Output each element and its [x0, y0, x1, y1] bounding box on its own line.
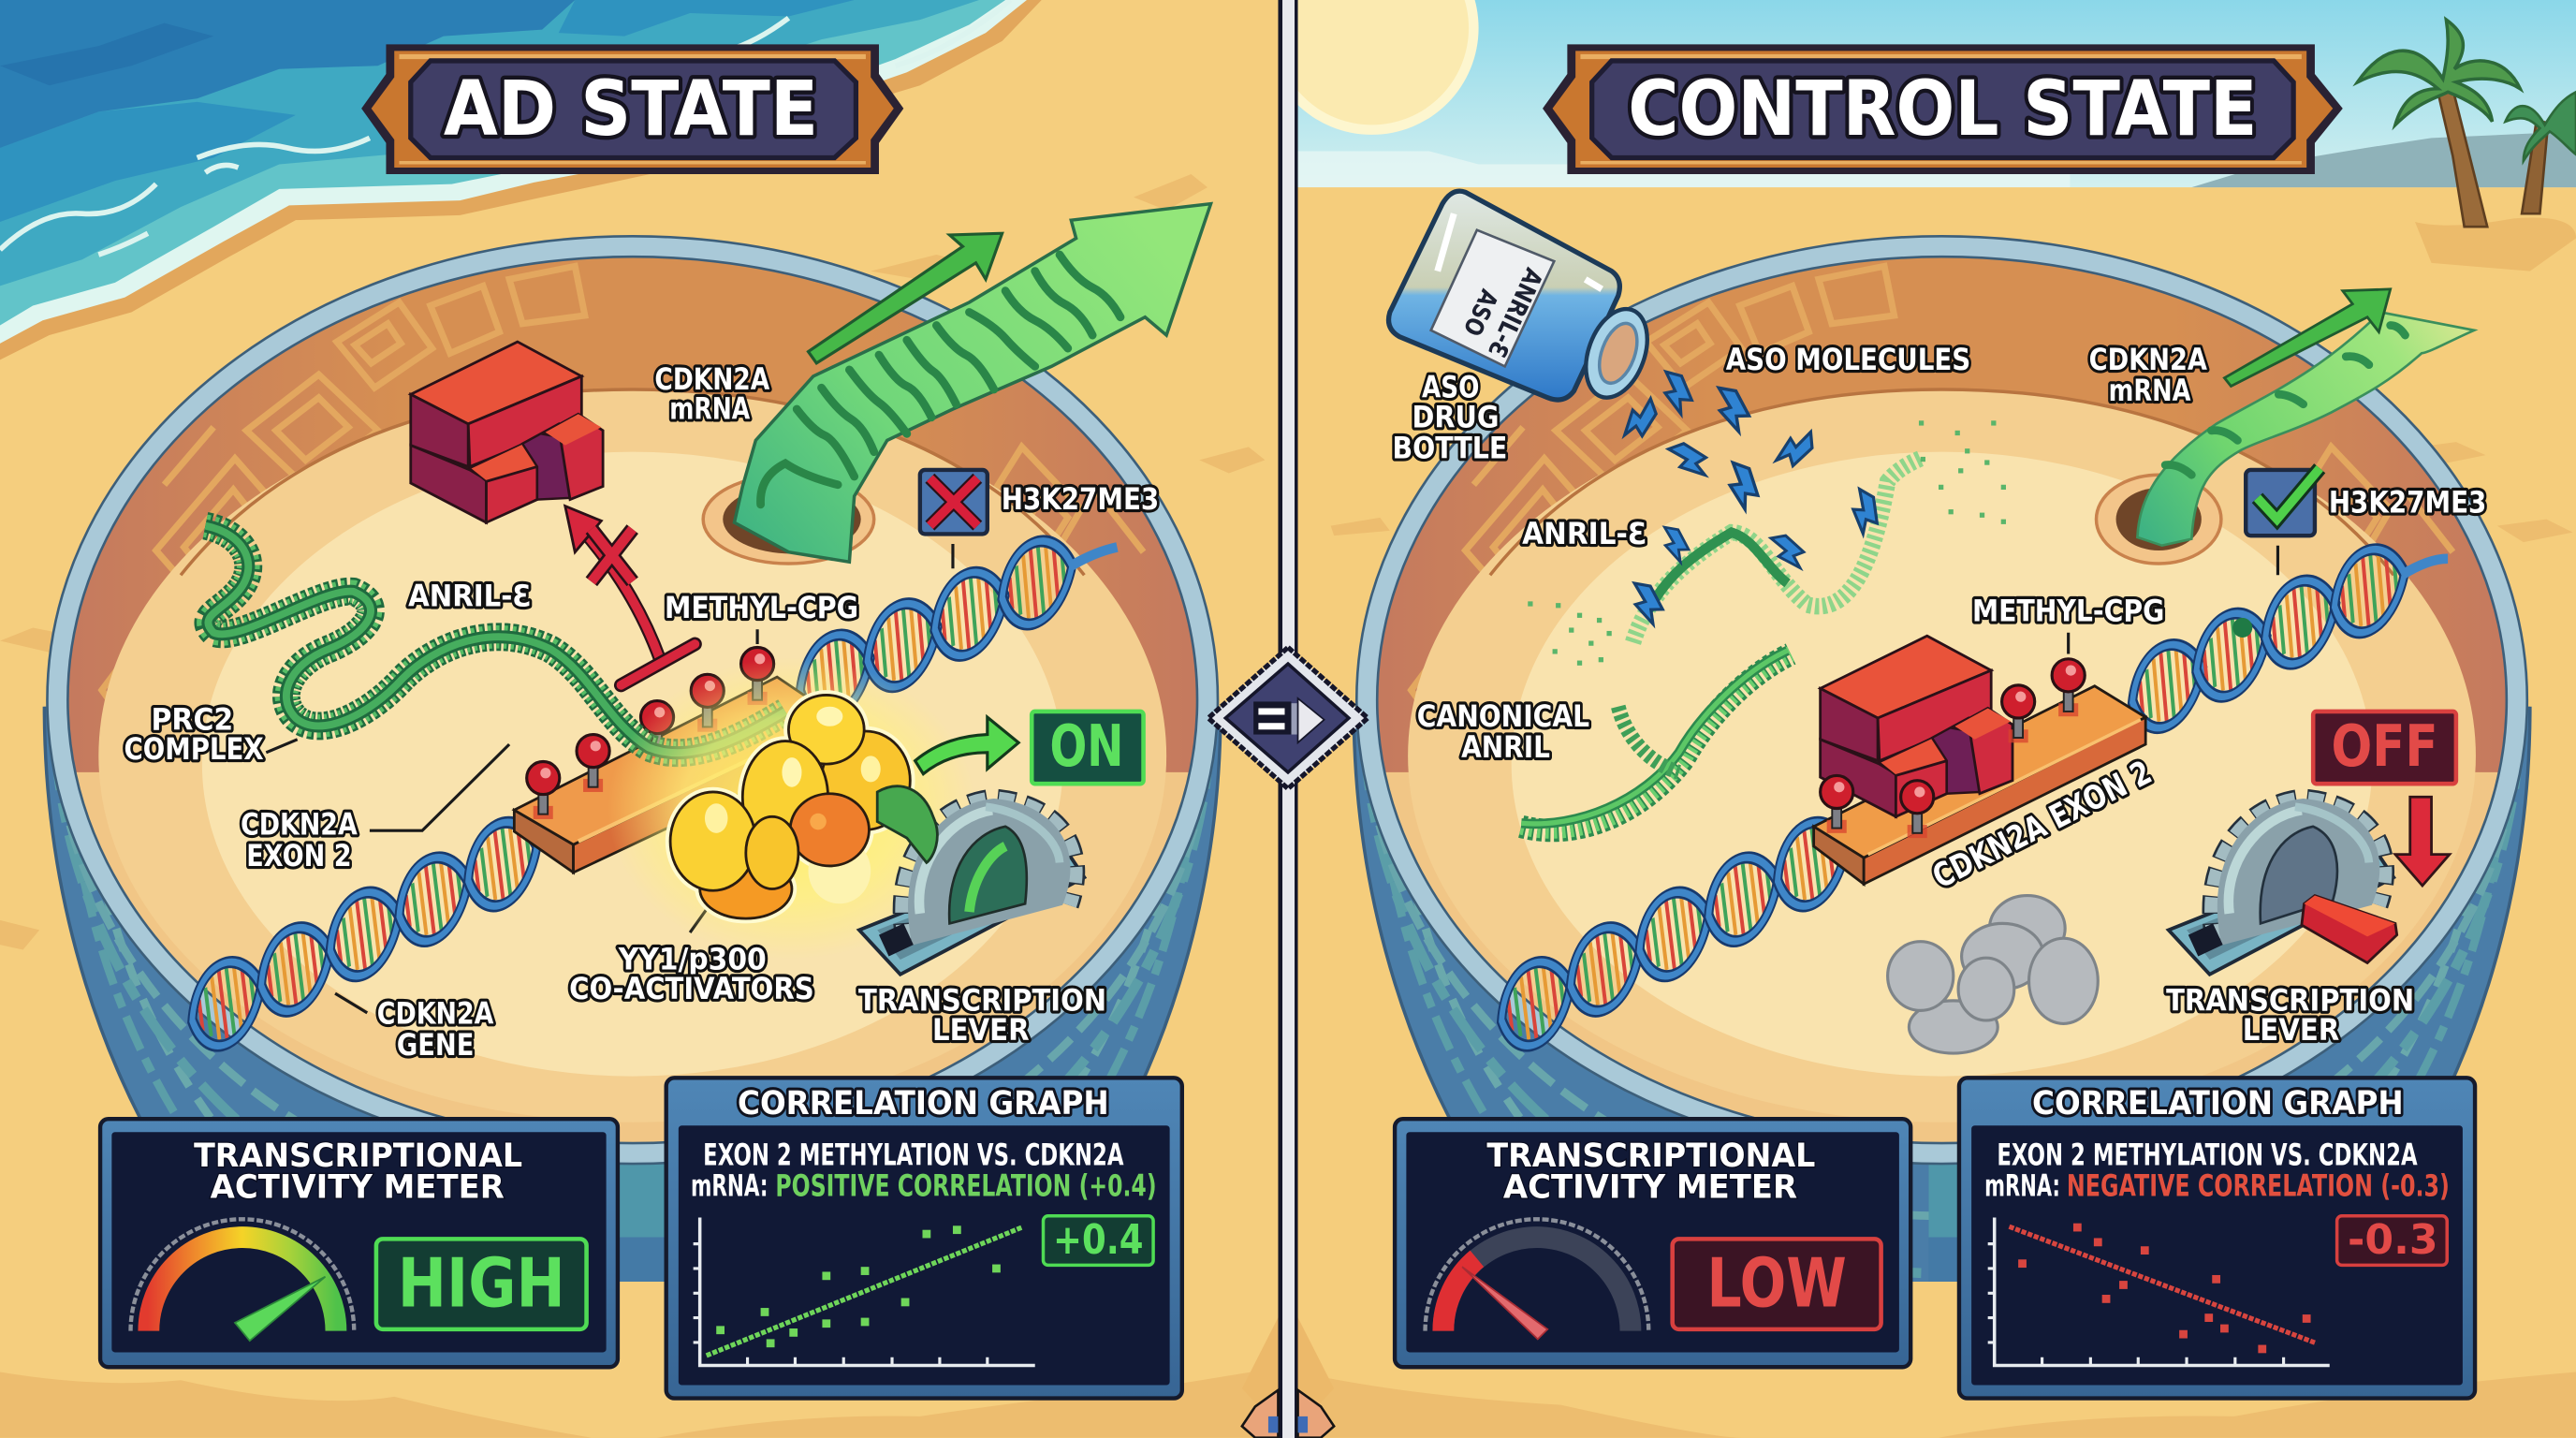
inhibited PRC2 recruitment arrow: [565, 506, 695, 685]
panel: correlation graph control: NEGATIVE CORRELATION (-0.3): [2067, 1170, 2450, 1204]
CDKN2A gene DNA helix lower control: [1472, 807, 1875, 1060]
panel: correlation graph control: mRNA:: [1984, 1170, 2060, 1204]
background: sand left panel: [0, 0, 1288, 1438]
label: METHYL-CPG: METHYL-CPG: [665, 592, 858, 625]
title banner: CONTROL STATE: [1543, 44, 2343, 174]
transcription lever off: [2169, 800, 2397, 975]
canonical ANRIL ribbon: [1521, 651, 1791, 830]
degraded RNA fragments dots: [1528, 420, 2006, 666]
CDKN2A mRNA large arrow: [735, 204, 1211, 562]
bottom shell ornament: [1242, 1390, 1334, 1438]
degraded ANRIL-epsilon ribbon: [1633, 459, 1921, 642]
-0.3 badge: -0.3: [2348, 1216, 2438, 1264]
label: transcription lever control: LEVER: [2243, 1014, 2339, 1048]
panel: correlation graph AD: CORRELATION GRAPH: [738, 1084, 1109, 1123]
LOW badge: LOW: [1707, 1243, 1847, 1322]
label: ASO molecules: ASO MOLECULES: [1726, 344, 1970, 377]
HIGH badge: HIGH: [398, 1243, 565, 1322]
center divider: [1242, 0, 1334, 1438]
green arrow to ON: [915, 717, 1018, 774]
palm trees: [2358, 20, 2576, 271]
red down arrow: [2395, 797, 2450, 886]
label: transcription lever: TRANSCRIPTION: [858, 984, 1106, 1018]
upward green arrow: [809, 233, 1003, 363]
label: CDKN2A mRNA control: CDKN2A: [2089, 344, 2207, 377]
methyl-CpG pins control: [1821, 659, 2085, 838]
CDKN2A gene DNA helix lower: [164, 807, 565, 1060]
label: H3K27ME3 control: H3K27ME3: [2329, 487, 2486, 521]
gauge high: [131, 1219, 354, 1341]
scatter chart negative: [1988, 1218, 2330, 1365]
label: CDKN2A mRNA: CDKN2A: [654, 363, 770, 397]
+0.4 badge: +0.4: [1053, 1216, 1144, 1264]
exon 2 platform control: [1814, 686, 2145, 884]
panel: meter control: TRANSCRIPTIONAL: [1486, 1137, 1815, 1175]
transcription lever on: [859, 786, 1084, 975]
panel: meter control: [1395, 1119, 1910, 1367]
gauge low: [1426, 1219, 1648, 1339]
label: CDKN2A gene: GENE: [397, 1029, 474, 1063]
ASO drug bottle: [1389, 191, 1659, 406]
label: ASO drug bottle: ASO: [1422, 372, 1479, 405]
upward green arrow control: [2224, 289, 2391, 386]
label: CDKN2A exon 2: EXON 2: [246, 840, 352, 873]
label: YY1/p300 co-activators: YY1/p300: [618, 944, 767, 977]
CDKN2A gene DNA helix upper control: [2104, 535, 2448, 741]
label: transcription lever control: TRANSCRIPTION: [2166, 984, 2414, 1018]
label: ANRIL-epsilon: ANRIL-Ɛ: [408, 580, 532, 614]
panel: correlation graph AD: mRNA:: [691, 1170, 768, 1204]
label: CDKN2A exon 2 rotated: CDKN2A EXON 2: [1926, 754, 2158, 897]
scatter chart positive: [694, 1218, 1035, 1365]
background: beach ocean: [0, 0, 1042, 360]
label: CDKN2A exon 2: CDKN2A: [241, 809, 358, 843]
methyl-CpG pins: [527, 648, 774, 819]
CDKN2A gene DNA helix upper: [772, 526, 1117, 731]
label: transcription lever: LEVER: [932, 1014, 1030, 1048]
label: METHYL-CPG control: METHYL-CPG: [1972, 594, 2164, 628]
panel: meter AD: [100, 1119, 618, 1367]
PRC2 complex red block: [411, 342, 603, 522]
inactive co-activators grey blob: [1888, 896, 2098, 1053]
mRNA pit control: [2097, 475, 2221, 564]
YY1/p300 co-activators glow: [607, 657, 976, 960]
ASO drug bottle: ANRIL-Ɛ: [1482, 263, 1547, 361]
label: CDKN2A gene: CDKN2A: [377, 997, 494, 1031]
PRC2 complex block bound: [1821, 636, 2012, 816]
OFF status badge: OFF: [2331, 713, 2438, 780]
center equals arrow diamond: [1208, 648, 1368, 788]
H3K27me3 restored icon: [2246, 468, 2320, 536]
label: CDKN2A mRNA: mRNA: [669, 393, 751, 427]
nucleus bowl: control state: [1310, 0, 2576, 1438]
label: canonical ANRIL: ANRIL: [1461, 731, 1550, 765]
H3K27me3 blocked icon: [920, 470, 988, 534]
panel: correlation graph control: [1959, 1078, 2475, 1399]
panel: correlation graph AD: [666, 1078, 1182, 1399]
background: sand right panel: [1298, 185, 2576, 1438]
mRNA pit: [703, 475, 874, 564]
panel: correlation graph AD: EXON 2 METHYLATION VS. CDKN2A: [703, 1138, 1124, 1172]
nucleus bowl: AD state: [0, 0, 1281, 1438]
background: sky with sun: [1265, 0, 2576, 187]
title banner: AD STATE: AD STATE: [444, 66, 818, 154]
ASO molecules: [1616, 372, 1887, 625]
label: CDKN2A mRNA control: mRNA: [2109, 374, 2191, 408]
reduced CDKN2A mRNA ribbon: [2137, 312, 2474, 546]
label: PRC2 complex: PRC2: [151, 703, 233, 737]
title banner: AD STATE: [361, 44, 903, 174]
exon 2 platform: [514, 677, 838, 873]
panel: meter AD: TRANSCRIPTIONAL: [194, 1137, 522, 1175]
panel: correlation graph AD: POSITIVE CORRELATION (+0.4): [775, 1170, 1157, 1204]
panel: AD state: [0, 0, 1281, 1438]
panel: correlation graph control: CORRELATION GRAPH: [2032, 1084, 2404, 1123]
panel: meter AD: ACTIVITY METER: [211, 1167, 505, 1206]
ASO drug bottle: ASO: [1457, 285, 1502, 340]
label: YY1/p300 co-activators: CO-ACTIVATORS: [569, 973, 814, 1006]
panel: control state: [1310, 0, 2576, 1438]
label: ASO drug bottle: DRUG: [1412, 401, 1500, 434]
label: canonical ANRIL: CANONICAL: [1417, 700, 1589, 734]
title banner: CONTROL STATE: CONTROL STATE: [1628, 66, 2258, 154]
panel: meter control: ACTIVITY METER: [1503, 1167, 1797, 1206]
label: ANRIL-epsilon control: ANRIL-Ɛ: [1522, 518, 1647, 551]
label: PRC2 complex: COMPLEX: [124, 733, 264, 767]
YY1/p300 co-activators blob: [670, 695, 910, 918]
panel: correlation graph control: EXON 2 METHYLATION VS. CDKN2A: [1997, 1138, 2418, 1172]
ANRIL-epsilon ribbon: [205, 526, 785, 753]
label: H3K27ME3: H3K27ME3: [1002, 483, 1159, 517]
ON status badge: ON: [1050, 713, 1123, 780]
label: ASO drug bottle: BOTTLE: [1392, 433, 1507, 466]
